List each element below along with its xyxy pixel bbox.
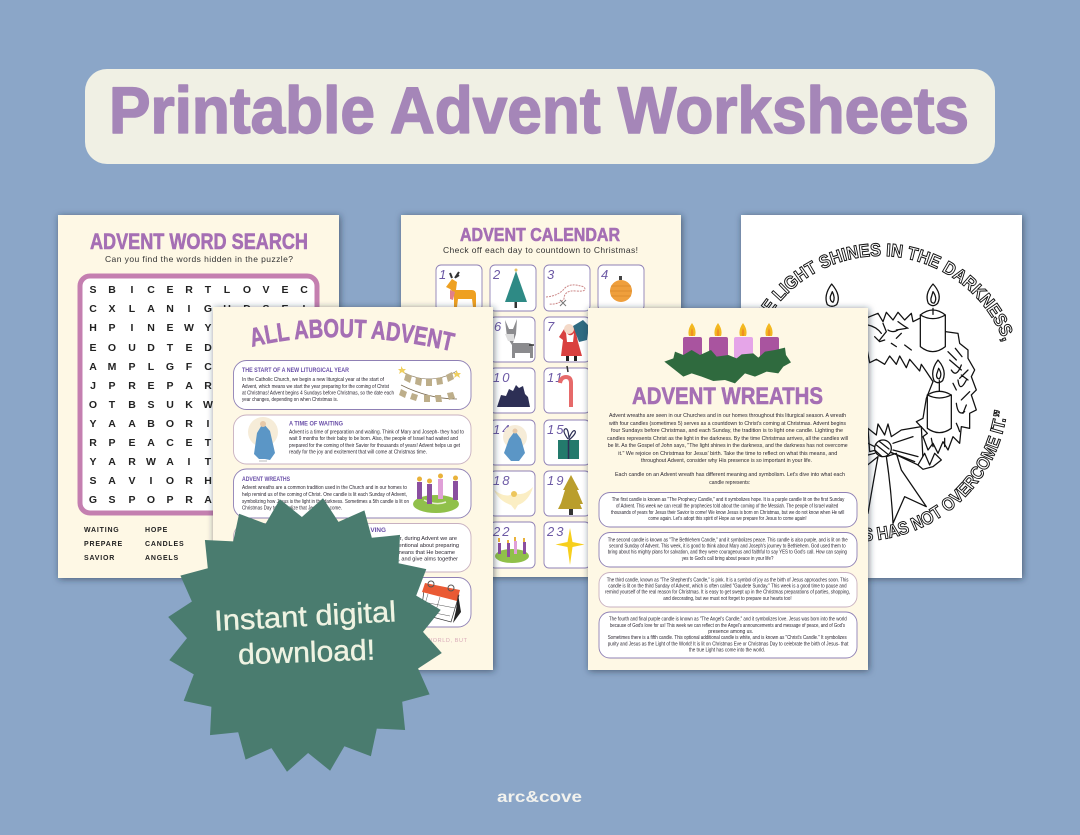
panel: advent calendar worksheet: 2 (492, 267, 501, 282)
footer line: WORLD, BUT (427, 638, 468, 644)
panel: advent calendar worksheet: ADVENT CALENDAR (460, 225, 620, 245)
panel: word search worksheet: S (262, 303, 270, 315)
panel: word search worksheet: E (281, 303, 289, 315)
card: second candle (599, 532, 857, 567)
panel: advent calendar worksheet: 1 (439, 267, 446, 282)
panel: word search worksheet: C (89, 303, 97, 315)
panel: word search worksheet: PREPARE (84, 541, 123, 548)
icon: mountains (497, 385, 530, 407)
panel: word search worksheet: F (186, 361, 193, 373)
panel: word search worksheet: I (207, 418, 210, 430)
panel: advent calendar worksheet: 10 (493, 370, 511, 385)
card: time of waiting: A TIME OF WAITING (289, 420, 343, 428)
card: fourth candle: presence among us. (708, 629, 753, 635)
panel: word search worksheet: I (303, 303, 306, 315)
panel: all about advent worksheet (209, 303, 499, 676)
panel: word search worksheet: P (108, 380, 116, 392)
card: second candle: bring about his mighty plans for salvation, and they were courageous and faithful to say YES to God's call. How can saying (608, 550, 847, 556)
card: second candle: second Sunday of Advent. This week, it is good to think about Mary and Joseph's journey to Bethlehem. God used them to (609, 544, 846, 550)
card: third candle: The third candle, known as "The Shepherd's Candle," is pink. It is a symbol of joy as the birth of Jesus approaches soon. This (607, 578, 849, 584)
card: advent wreaths: symbolizing how Jesus is the light in the darkness. Sometimes a 5th candle is lit on (242, 499, 409, 505)
icon: calendar (415, 581, 461, 623)
panel: coloring page (737, 211, 1028, 584)
panel: word search worksheet: N (147, 322, 155, 334)
card: time of waiting: Advent is a time of preparation and waiting. Think of Mary and Joseph- they had to (289, 430, 464, 436)
card: preparing and giving: ver, during Advent we are (394, 536, 457, 542)
panel: word search worksheet: P (108, 322, 116, 334)
panel: word search worksheet: P (128, 361, 136, 373)
panel: word search worksheet: S (147, 399, 155, 411)
coloring page quote top: “THE LIGHT SHINES IN THE DARKNESS, (759, 242, 1012, 342)
card: first candle: come again. Let's adopt this spirit of Hope as we prepare for Jesus to come again! (648, 516, 807, 522)
panel: word search worksheet: A (108, 418, 116, 430)
card: time of waiting (234, 415, 471, 464)
panel: word search worksheet (58, 215, 339, 578)
panel: word search worksheet: T (205, 437, 212, 449)
panel: word search worksheet: L (148, 361, 155, 373)
panel: word search worksheet: V (128, 475, 136, 487)
panel: word search worksheet: L (129, 303, 136, 315)
panel: word search worksheet: S (108, 494, 116, 506)
panel: word search worksheet: G (166, 361, 174, 373)
panel: word search worksheet: A (147, 437, 155, 449)
intro text: candles represents Christ as the light in the darkness. By the time Christmas arrives, all the candles will (607, 436, 848, 442)
panel: word search worksheet: X (108, 303, 116, 315)
panel: word search worksheet: U (223, 303, 231, 315)
card: advent wreaths: ADVENT WREATHS (242, 476, 291, 483)
card: first candle: The first candle is known as "The Prophecy Candle," and it symbolizes hope. It is a purple candle lit on the first Sunday (612, 497, 845, 503)
panel: word search worksheet: D (147, 342, 155, 354)
panel: word search worksheet: CANDLES (145, 541, 184, 548)
panel: word search worksheet: G (89, 494, 97, 506)
panel: word search worksheet: R (185, 284, 193, 296)
panel: word search worksheet: T (205, 456, 212, 468)
panel: word search worksheet: Y (89, 418, 97, 430)
panel: word search worksheet: C (300, 284, 308, 296)
intro text (607, 413, 848, 486)
icon: santa (559, 320, 589, 361)
icon: donkey (505, 319, 534, 358)
panel: advent calendar worksheet (401, 215, 681, 577)
card: third candle: remind yourself of the real reason for Christmas. It is easy to get swept up in the Christmas preparations of parties, shopping, (605, 590, 850, 596)
card: fourth candle (599, 612, 857, 658)
heading: advent wreaths: ADVENT WREATHS (632, 383, 823, 410)
panel: word search worksheet: P (108, 437, 116, 449)
panel: advent calendar worksheet: 6 (494, 319, 502, 334)
panel: word search worksheet: P (128, 494, 136, 506)
card: time of waiting: wait 9 months for their baby to be born. Also, the people of Israel had waited and (288, 436, 458, 442)
panel: word search worksheet: S (89, 284, 97, 296)
panel: word search worksheet: I (188, 456, 191, 468)
panel: word search worksheet: N (166, 303, 174, 315)
panel: advent calendar worksheet: 15 (547, 422, 565, 437)
panel: word search worksheet: B (108, 284, 116, 296)
panel: word search worksheet: U (166, 399, 174, 411)
panel: word search worksheet: A (108, 456, 116, 468)
panel: word search worksheet: H (89, 322, 97, 334)
card: preparing and giving: ntentional about preparing (394, 543, 459, 549)
card: second candle: yes to God's call bring about peace in your life? (682, 556, 773, 562)
panel: word search worksheet: B (128, 399, 136, 411)
panel: word search worksheet: D (243, 303, 251, 315)
card: liturgical year (234, 360, 471, 410)
icon: advent wreath (413, 474, 459, 513)
panel: advent calendar worksheet: 18 (493, 473, 511, 488)
panel: word search worksheet: R (185, 494, 193, 506)
panel: advent calendar worksheet: Check off each day to countdown to Christmas! (443, 245, 638, 255)
card: first candle: of Advent. This week we can recall the prophecies told about the coming of the Messiah. The people of Israel waited (616, 504, 838, 510)
heading: all about advent: ALL ABOUT ADVENT (252, 318, 456, 350)
card: preparing and giving (234, 524, 471, 572)
panel: word search worksheet: I (150, 475, 153, 487)
panel: word search worksheet: A (185, 380, 193, 392)
panel: word search worksheet: R (185, 418, 193, 430)
panel: word search worksheet: T (205, 284, 212, 296)
panel: word search worksheet: O (166, 418, 174, 430)
card: fourth candle: Sometimes there is a fifth candle. This optional additional candle is white, and is known as "Christ's Candle." It symbolizes (608, 635, 847, 641)
panel: word search worksheet: G (204, 303, 212, 315)
panel: word search worksheet: O (147, 494, 155, 506)
panel: word search worksheet: E (147, 380, 155, 392)
icon: gold tree (558, 475, 583, 515)
intro text: be lit. As the Gospel of John says, "The light shines in the darkness, and the darkness has not overcome (608, 443, 848, 449)
panel: word search worksheet: P (166, 494, 174, 506)
card: time of waiting: prepared for the coming of their Savior for thousands of years! Advent helps us get (289, 443, 460, 449)
intro text: Each candle on an Advent wreath has different meaning and symbolism. Let's dive into what each (615, 472, 845, 478)
panel: word search worksheet: HOPE (145, 527, 168, 534)
panel: advent calendar worksheet: 4 (601, 267, 608, 282)
panel: word search worksheet: ANGELS (145, 555, 179, 562)
panel: word search worksheet: C (204, 361, 212, 373)
icon: gift (558, 429, 579, 459)
panel: word search worksheet: J (90, 380, 96, 392)
panel: word search worksheet: U (128, 342, 136, 354)
panel: word search worksheet: K (185, 399, 193, 411)
panel: word search worksheet: T (167, 342, 174, 354)
icon: candy cane (560, 366, 571, 407)
icon: reindeer (446, 272, 476, 307)
panel: word search worksheet: O (89, 399, 97, 411)
card: liturgical year: Advent, which means we start the year preparing for the coming of Christ (242, 384, 389, 390)
panel: word search worksheet: I (131, 322, 134, 334)
card: advent wreaths: Christmas Day to symbolize that Jesus has come. (242, 506, 342, 512)
intro text: it." We rejoice on Christmas for Jesus' birth. Take the time to reflect on what this means, and (618, 451, 837, 457)
panel: word search worksheet: L (224, 284, 231, 296)
panel: word search worksheet: E (185, 342, 193, 354)
panel: word search worksheet: W (184, 322, 194, 334)
panel: word search worksheet: E (166, 322, 174, 334)
panel: word search worksheet: Can you find the words hidden in the puzzle? (105, 254, 293, 264)
panel: word search worksheet: R (185, 475, 193, 487)
panel: advent wreaths worksheet (588, 308, 868, 670)
panel: word search worksheet: T (109, 399, 116, 411)
panel: advent calendar worksheet: 23 (546, 524, 565, 539)
panel: word search worksheet: A (147, 303, 155, 315)
icon: candle wreath (495, 537, 529, 563)
icon: happy new year banner (398, 366, 461, 402)
panel: word search worksheet: WAITING (84, 527, 120, 534)
panel: word search worksheet: R (204, 380, 212, 392)
panel: word search worksheet: O (166, 475, 174, 487)
panel: word search worksheet: O (243, 284, 251, 296)
icon: christmas tree (505, 268, 527, 308)
card: advent wreaths: help remind us of the coming of Christ. One candle is lit each Sunday of Advent, (242, 492, 407, 498)
starburst badge: download! (238, 635, 376, 671)
panel: word search worksheet: Y (204, 322, 212, 334)
icon: Mary (503, 425, 527, 461)
panel: word search worksheet: H (204, 475, 212, 487)
card: liturgical year: year changes, depending on when Christmas is. (242, 397, 338, 403)
panel: word search worksheet: A (108, 475, 116, 487)
panel: word search worksheet: V (262, 284, 270, 296)
panel: word search worksheet: S (89, 475, 97, 487)
panel: word search worksheet: O (108, 342, 116, 354)
starburst badge: Instant digital (213, 596, 397, 638)
card: calendar (234, 578, 471, 627)
panel: advent calendar worksheet: 19 (547, 473, 565, 488)
card: advent wreaths (234, 469, 471, 518)
panel: word search worksheet: I (188, 303, 191, 315)
intro text: four Sundays before Christmas, and each Sunday, the tradition is to light one candle. Lighting the (611, 428, 843, 434)
panel: word search worksheet: A (166, 456, 174, 468)
icon: treasure map (546, 285, 585, 306)
intro text: throughout Advent, consider why His presence is so important in your life. (641, 458, 812, 464)
panel: word search worksheet: A (128, 418, 136, 430)
card: second candle: The second candle is known as "The Bethlehem Candle," and it symbolizes peace. This candle is also purple, and is lit on the (608, 538, 848, 544)
card: liturgical year: THE START OF A NEW LITURGICAL YEAR (242, 367, 349, 374)
panel: word search worksheet: A (89, 361, 97, 373)
panel: word search worksheet: D (204, 342, 212, 354)
panel: word search worksheet: C (166, 437, 174, 449)
panel: word search worksheet: P (166, 380, 174, 392)
panel: word search worksheet: W (203, 399, 213, 411)
brand logo: arc&cove (497, 789, 582, 806)
coloring page quote bottom: AND THE DARKNESS HAS NOT OVERCOME IT.” (868, 410, 1006, 542)
intro text: candle represents: (709, 480, 751, 486)
panel: word search worksheet: ADVENT WORD SEARCH (90, 229, 308, 254)
panel: word search worksheet: R (128, 456, 136, 468)
panel: advent calendar worksheet: 3 (547, 267, 555, 282)
card: fourth candle: the true Light has come into the world. (689, 648, 765, 654)
icon: star (556, 528, 584, 565)
card: preparing and giving: t means that He became (394, 550, 455, 556)
icon: Mary (248, 417, 278, 462)
card: fourth candle: The fourth and final purple candle is known as "The Angel's Candle," and it symbolizes love. Jesus was born into the world (609, 616, 847, 622)
panel: word search worksheet: SAVIOR (84, 555, 115, 562)
card: third candle (599, 572, 857, 607)
panel: advent calendar worksheet: 22 (492, 524, 511, 539)
panel: word search worksheet: R (89, 437, 97, 449)
panel: word search worksheet: W (146, 456, 156, 468)
intro text: with four candles (sometimes 5) serves as a countdown to Christ's coming at Christmas. Advent begins (608, 421, 846, 427)
panel: word search worksheet: E (128, 437, 136, 449)
card: fourth candle: purity and Jesus as the Light of the World! It is lit on Christmas Eve or Christmas Day to celebrate the birth of Jesus- that (608, 642, 849, 648)
card: advent wreaths: Advent wreaths are a common tradition used in the Church and in our homes to (242, 485, 407, 491)
panel: word search worksheet: M (108, 361, 117, 373)
panel: word search worksheet: C (147, 284, 155, 296)
title banner: Printable Advent Worksheets (109, 73, 969, 147)
panel: advent calendar worksheet: 11 (547, 370, 564, 385)
wreath line drawing (861, 284, 976, 523)
illustration: advent candles and greenery (664, 323, 791, 383)
icon: left candle flame (826, 284, 838, 306)
panel: word search worksheet: E (281, 284, 289, 296)
panel: word search worksheet: B (147, 418, 155, 430)
card: third candle: and decorating, but we must not forget to prepare our hearts too! (663, 596, 792, 602)
panel: word search worksheet: Y (89, 456, 97, 468)
icon: ornament (610, 276, 632, 302)
panel: word search worksheet: R (128, 380, 136, 392)
panel: word search worksheet: E (89, 342, 97, 354)
panel: advent calendar worksheet: 14 (493, 422, 511, 437)
card: time of waiting: ready for the joy and excitement that will come at Christmas time. (289, 450, 427, 456)
panel: advent calendar worksheet: 7 (547, 319, 555, 334)
intro text: Advent wreaths are seen in our Churches and in our homes throughout this liturgical season. A wreath (609, 413, 846, 419)
panel: word search worksheet: I (131, 284, 134, 296)
card: preparing and giving: VING (370, 527, 386, 534)
panel: word search worksheet: E (185, 437, 193, 449)
card: liturgical year: In the Catholic Church, we begin a new liturgical year at the start of (242, 377, 384, 383)
panel: word search worksheet: A (204, 494, 212, 506)
starburst badge (168, 498, 442, 772)
icon: dove (494, 487, 533, 510)
panel: word search worksheet: E (166, 284, 174, 296)
card: fourth candle: because of God's love for us! This week we can reflect on the Angel's announcements and message of peace, and of God's (610, 623, 845, 629)
card: liturgical year: at Christmas! Advent begins 4 Sundays before Christmas, so the date each (242, 390, 394, 396)
card: first candle: thousands of years for Jesus their Savior to come! We know Jesus is born on Christmas, but we do not know when He will (611, 510, 844, 516)
card: third candle: candle is lit on the third Sunday of Advent, which is often called "Gaudete Sunday." This week is a good time to pause and (608, 584, 847, 590)
card: preparing and giving: nt, and give alms together (394, 556, 458, 562)
card: first candle (599, 492, 857, 527)
